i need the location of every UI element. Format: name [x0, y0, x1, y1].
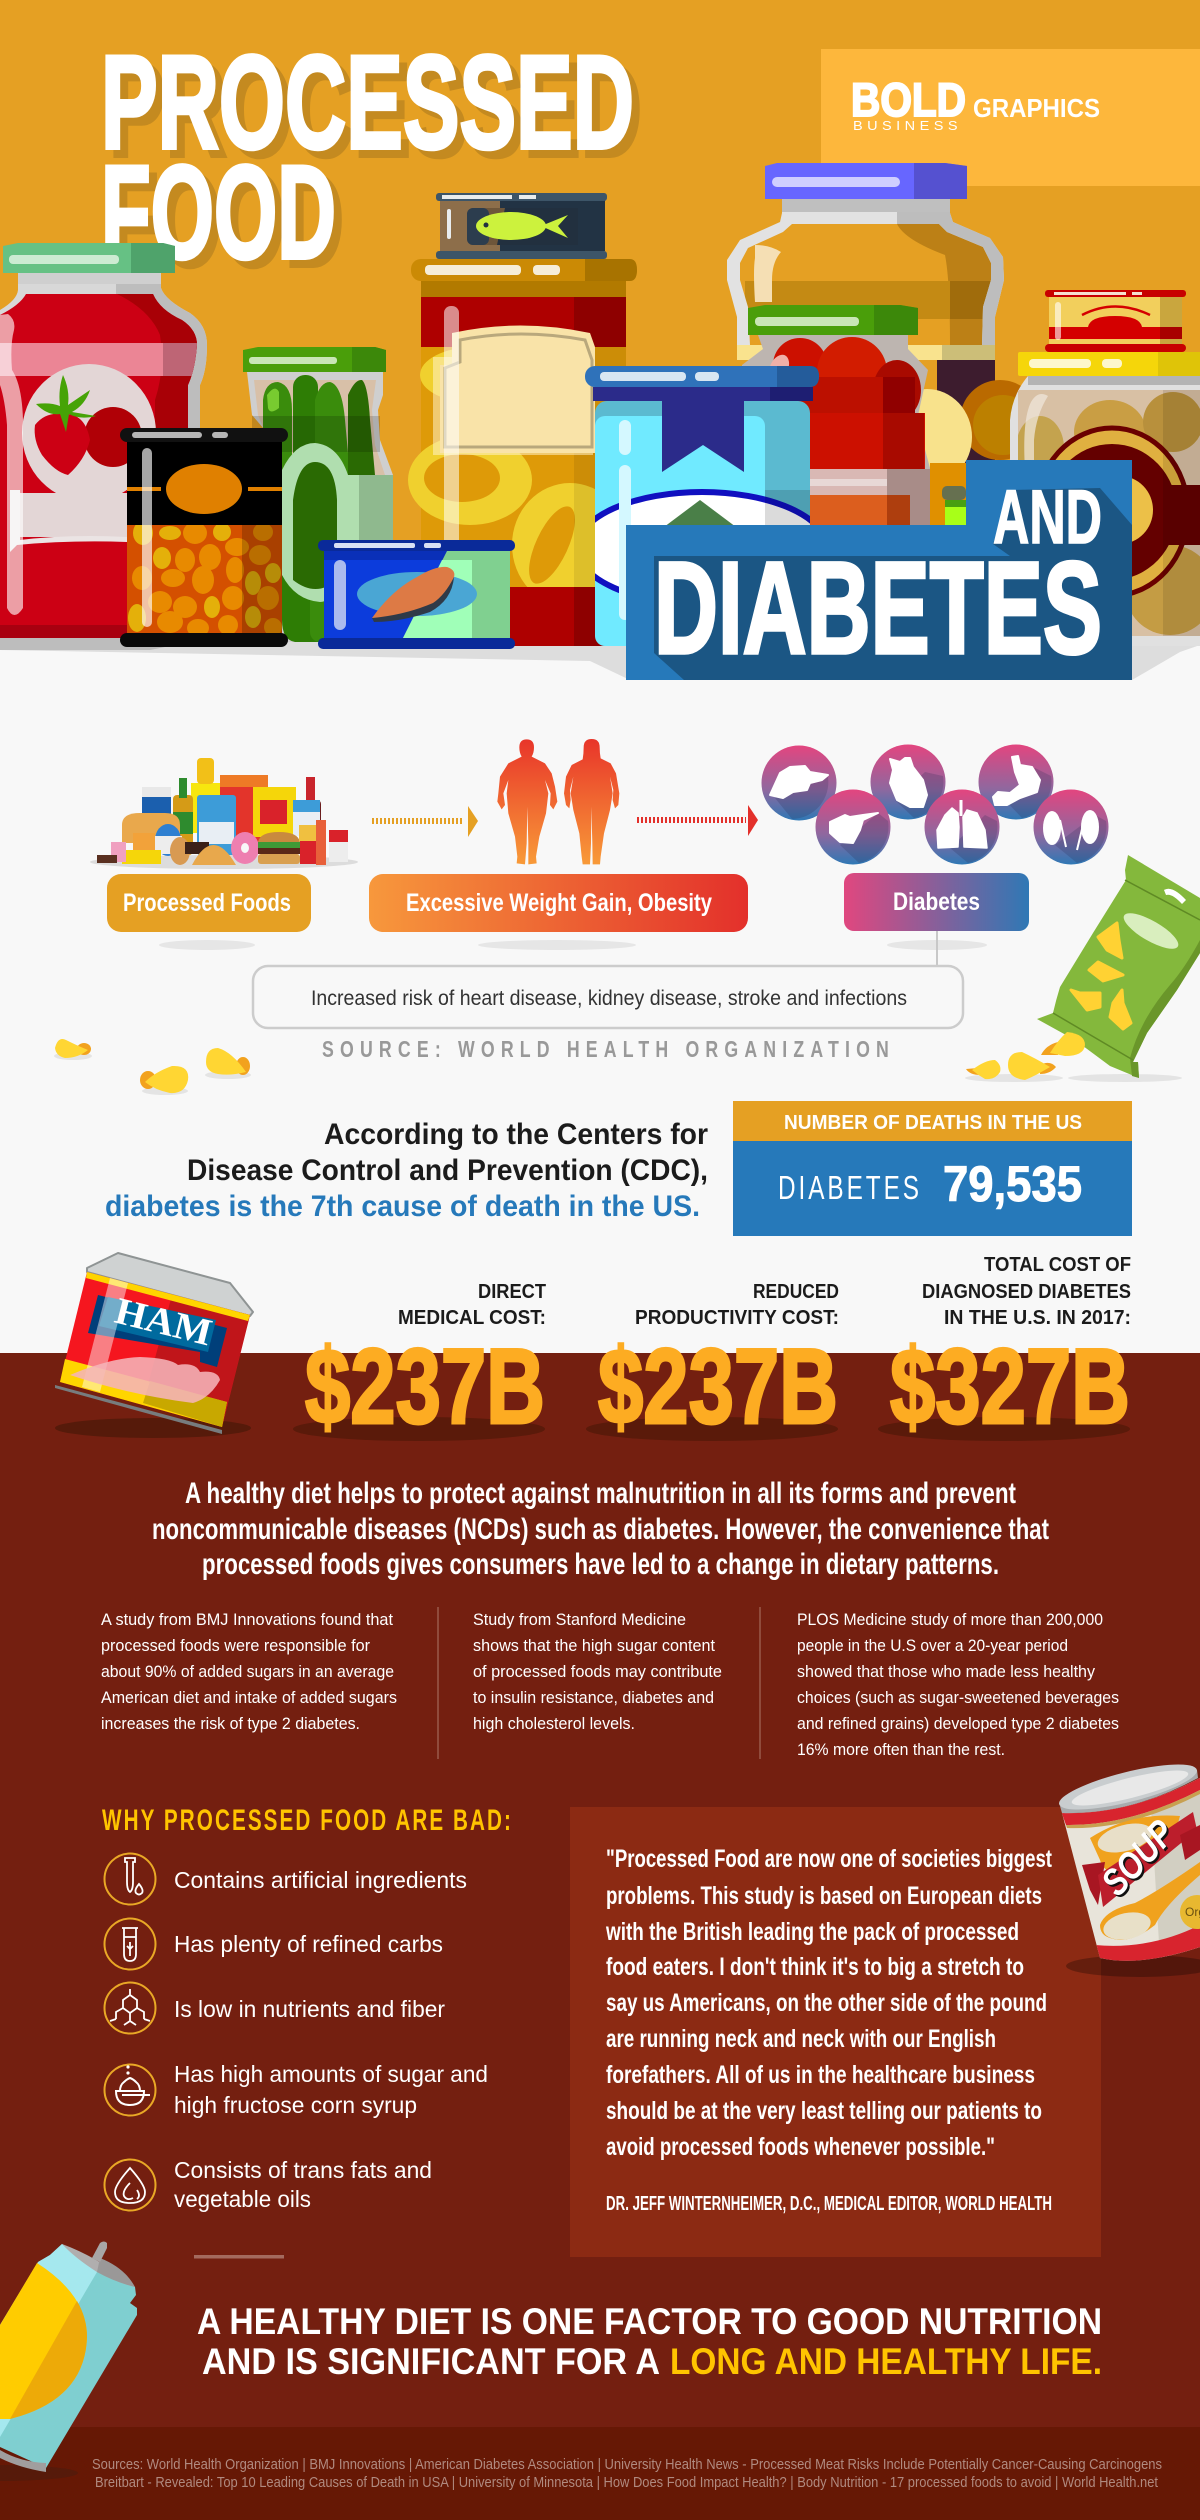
item: low nutrients [104, 1982, 445, 2034]
logo box: GRAPHICS [973, 93, 1100, 123]
item: trans fats: Consists of trans fats and [174, 2157, 432, 2183]
cost label: total cost: TOTAL COST OF [984, 1253, 1131, 1276]
small red and gold tin [1045, 290, 1186, 352]
text block: plos study: PLOS Medicine study of more than 200,000 [797, 1610, 1103, 1629]
cost label: total cost: DIAGNOSED DIABETES [922, 1280, 1131, 1303]
callout: increased risk [253, 966, 963, 1028]
text block: stanford study: high cholesterol levels. [473, 1714, 635, 1733]
stat box: deaths: 79,535 [943, 1156, 1082, 1212]
quote text: should be at the very least telling our patients to [606, 2097, 1042, 2125]
jar lid [411, 259, 637, 281]
heading: cdc: According to the Centers for [324, 1118, 708, 1151]
panel: costs [55, 1253, 1131, 1446]
item: sugar: Has high amounts of sugar and [174, 2061, 488, 2087]
icon: kidneys [1034, 790, 1108, 864]
icon: processed foods pile [90, 758, 358, 869]
label: diabetes [844, 873, 1029, 931]
logo box [821, 49, 1200, 186]
item: refined carbs: Has plenty of refined carbs [174, 1931, 443, 1957]
text block: bmj study: A study from BMJ Innovations found that [101, 1610, 393, 1629]
icon: scattered chips [54, 1032, 1085, 1095]
stat box: deaths [733, 1101, 1132, 1236]
title: Processed Food: PROCESSED [109, 37, 642, 185]
callout: increased risk: Increased risk of heart disease, kidney disease, stroke and infections [311, 987, 907, 1010]
text block: bmj study: increases the risk of type 2 diabetes. [101, 1714, 360, 1733]
label: processed foods [107, 874, 311, 932]
arrow: dotted red [637, 805, 758, 836]
mushroom jar lid [1018, 352, 1200, 376]
tall yellow jar with fish can [408, 193, 637, 646]
closing statement: AND IS SIGNIFICANT FOR A [202, 2341, 660, 2382]
title: Processed Food: FOOD [109, 147, 344, 295]
icon: two silhouettes [497, 739, 619, 864]
label: obesity: Excessive Weight Gain, Obesity [406, 889, 712, 917]
stat box: deaths: DIABETES [778, 1169, 922, 1206]
quote text [605, 1845, 1052, 2161]
salmon tin [318, 540, 515, 649]
icon: organ circles [762, 744, 1108, 864]
title: Processed Food: PROCESSED [101, 29, 634, 177]
text block: bmj study: processed foods were responsible for [101, 1636, 370, 1655]
icon: stomach [978, 744, 1054, 820]
item: refined carbs [104, 1918, 443, 1970]
title: Processed Food [101, 29, 642, 295]
heading: cdc: diabetes is the 7th cause of death in the US. [105, 1190, 700, 1223]
text block: stanford study: to insulin resistance, diabetes and [473, 1688, 714, 1707]
panel: why processed food are bad [102, 1804, 513, 2212]
cost label: total cost [922, 1253, 1131, 1329]
icon: liver [762, 746, 836, 820]
source line: SOURCE: WORLD HEALTH ORGANIZATION [322, 1036, 895, 1062]
stat box: deaths: NUMBER OF DEATHS IN THE US [784, 1112, 1082, 1134]
panel: cdc statement [105, 1101, 1132, 1236]
stat: productivity cost: $237B [598, 1326, 838, 1446]
label: diabetes: Diabetes [893, 888, 980, 916]
item: sugar [104, 2061, 488, 2118]
logo box: BOLD [851, 73, 966, 126]
icon: pancreas [816, 790, 890, 864]
text block: plos study: and refined grains) developed type 2 diabetes [797, 1714, 1119, 1733]
text block: stanford study: of processed foods may contribute [473, 1662, 722, 1681]
sources [92, 2456, 1162, 2491]
logo box: BUSINESS [853, 118, 962, 133]
panel: brown background [0, 1353, 1200, 2520]
quote text: say us Americans, on the other side of the pound [606, 1989, 1047, 2017]
quote text: avoid processed foods whenever possible." [606, 2133, 995, 2161]
panel: footer band [0, 2427, 1200, 2520]
title: and diabetes: AND [993, 475, 1102, 560]
closing statement: A HEALTHY DIET IS ONE FACTOR TO GOOD NUTRITION [197, 2301, 1102, 2342]
cost label: direct medical: MEDICAL COST: [398, 1306, 546, 1329]
tomato jar lid [3, 243, 175, 273]
label: obesity [369, 874, 748, 932]
green pickle jar [243, 347, 393, 642]
black can with orange label [120, 428, 288, 647]
text block: bmj study: American diet and intake of added sugars [101, 1688, 397, 1707]
icon: ham can [55, 1253, 253, 1438]
quote text: problems. This study is based on European diets [606, 1882, 1042, 1910]
cost label: reduced productivity: REDUCED [753, 1280, 839, 1303]
cost label: total cost: IN THE U.S. IN 2017: [944, 1306, 1131, 1329]
text block: plos study: choices (such as sugar-sweetened beverages [797, 1688, 1119, 1707]
decorative short bar [194, 2255, 284, 2258]
quote text: forefathers. All of us in the healthcare business [606, 2061, 1035, 2089]
soup label text: SOUP [1094, 1812, 1184, 1904]
item: trans fats: vegetable oils [174, 2186, 311, 2212]
text block: plos study: showed that those who made less healthy [797, 1662, 1095, 1681]
title: and diabetes [626, 460, 1132, 681]
glass outline [727, 199, 1004, 345]
pepper jar lid [748, 305, 918, 335]
panel: causes flow [54, 739, 1200, 1095]
closing statement [197, 2301, 1102, 2382]
item: artificial ingredients [104, 1854, 467, 1904]
text block: stanford study: Study from Stanford Medicine [473, 1610, 686, 1629]
ham label text: HAM [111, 1290, 216, 1354]
arrow: dotted orange [372, 806, 478, 837]
bottle band [745, 281, 950, 319]
light blue can [577, 366, 827, 646]
text block: bmj study [101, 1610, 397, 1733]
ribbon [662, 401, 744, 472]
quote text: with the British leading the pack of processed [605, 1918, 1019, 1946]
icon: lungs [924, 790, 1000, 864]
cost label: direct medical: DIRECT [478, 1280, 546, 1303]
cost label: reduced productivity: PRODUCTIVITY COST: [635, 1306, 839, 1329]
quote text: "Processed Food are now one of societies biggest [606, 1845, 1052, 1873]
mushroom jar with small tin [1010, 290, 1200, 646]
item: low nutrients: Is low in nutrients and fiber [174, 1996, 445, 2022]
heading: cdc [105, 1118, 708, 1223]
item: trans fats [104, 2157, 432, 2212]
text block: plos study: 16% more often than the rest. [797, 1740, 1005, 1759]
text block: healthy diet intro [152, 1477, 1049, 1581]
cost label: direct medical [398, 1280, 546, 1329]
text block: plos study: people in the U.S over a 20-year period [797, 1636, 1068, 1655]
icon: chip bag [1037, 855, 1200, 1082]
icon: heart [870, 744, 946, 820]
panel: header [0, 0, 1200, 681]
label: processed foods: Processed Foods [123, 889, 291, 917]
soup label text: SOUP [1096, 1814, 1186, 1906]
red pepper jar [742, 305, 930, 640]
panel: quote [570, 1807, 1101, 2257]
item: artificial ingredients: Contains artificial ingredients [174, 1867, 467, 1893]
text block: bmj study: about 90% of added sugars in an average [101, 1662, 394, 1681]
icon: soup can [1055, 1755, 1200, 1977]
icon: soda can [0, 2242, 137, 2481]
text block: stanford study: shows that the high sugar content [473, 1636, 715, 1655]
item: sugar: high fructose corn syrup [174, 2092, 417, 2118]
text block: plos study [797, 1610, 1119, 1759]
text block: stanford study [473, 1610, 722, 1733]
stat: medical cost: $237B [305, 1326, 545, 1446]
bottle right shade [897, 222, 1003, 345]
fish tin [436, 193, 607, 259]
heading: cdc: Disease Control and Prevention (CDC), [187, 1154, 708, 1187]
big glass bottle with purple lid [727, 163, 1040, 640]
heading: why bad: WHY PROCESSED FOOD ARE BAD: [102, 1804, 513, 1837]
closing statement: LONG AND HEALTHY LIFE. [670, 2341, 1102, 2382]
red tomato jar [0, 243, 207, 650]
title: Processed Food: FOOD [101, 139, 336, 287]
pickle jar lid [243, 347, 386, 372]
quote text: are running neck and neck with our English [606, 2025, 996, 2053]
cost label: reduced productivity [635, 1280, 839, 1329]
stat: total cost: $327B [890, 1326, 1130, 1446]
quote text: food eaters. I don't think it's to big a stretch to [606, 1953, 1024, 1981]
floor shadow [0, 642, 1200, 680]
